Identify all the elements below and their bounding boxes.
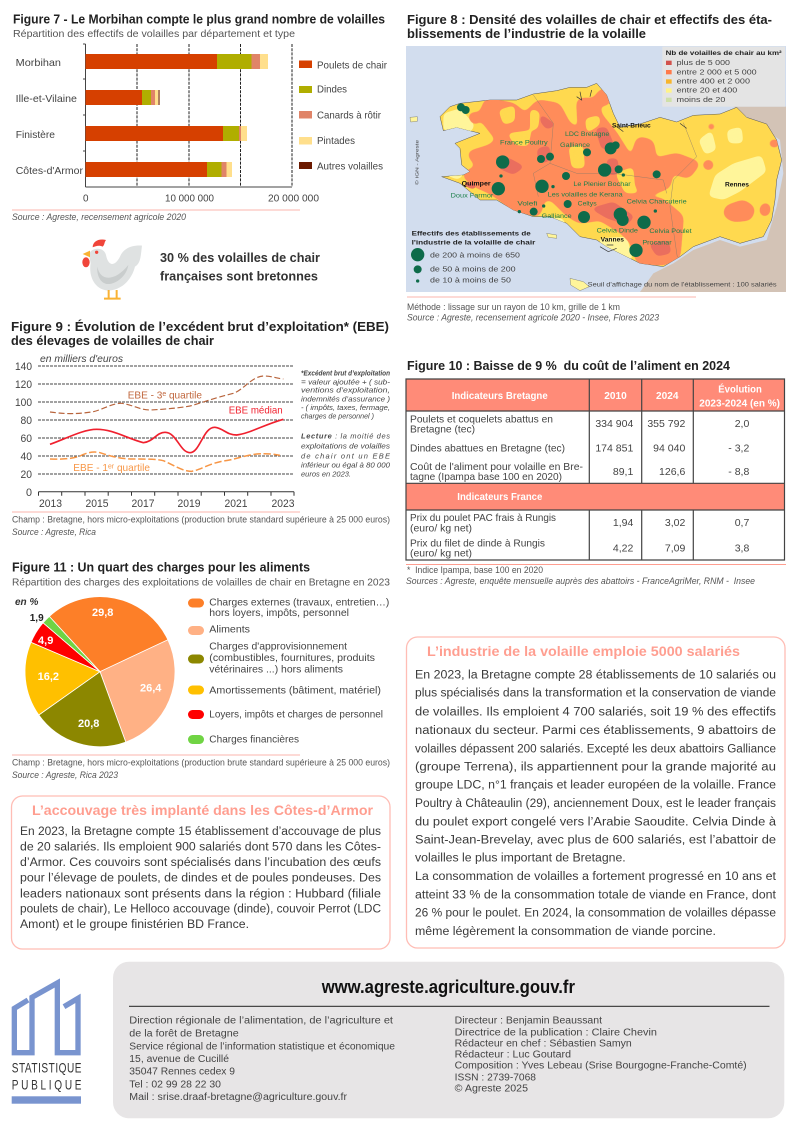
legend: establishment size: de 10 à moins de 50 [430,278,511,285]
table: indicators: 2024 [656,390,679,402]
row: coût aliment: - 8,8 [728,466,749,478]
source: figure 10: Sources : Agreste, enquête mensuelle auprès des abattoirs - FranceAgriMer, RNM - Insee [406,576,755,586]
row: coût aliment: Coût de l'aliment pour volaille en Bre- [410,461,583,473]
establishment labels [451,123,750,247]
legend: charges: Charges financières [209,734,299,746]
legend: establishment size: l'industrie de la volaille de chair [412,239,536,246]
bars: Finistère [86,126,247,141]
credit: IGN: © IGN - Agreste [413,140,420,185]
legend: establishment size: Effectifs des établissements de [412,230,531,237]
source: figure 10 [406,565,755,586]
footer address: Mail : srise.draaf-bretagne@agriculture.gouv.fr [129,1092,348,1103]
legend: establishment size: de 200 à moins de 650 [430,253,520,260]
footer credits [455,1015,747,1095]
text: industrie body: de volailles. Ils emploient 4 700 salariés, soit 19 % des effectifs [415,707,776,719]
establishment labels: LDC Bretagne [565,131,610,138]
panel: figure 10 [406,358,786,586]
row: prix dinde: 7,09 [665,543,685,555]
note: reading guide: inférieur ou égal à 80 000 [301,460,391,469]
establishment labels: Galliance [560,142,591,149]
note: EBE definition [301,369,391,420]
source: figure 8: Source : Agreste, recensement agricole 2020 - Insee, Flores 2023 [407,312,659,322]
row: prix poulet [410,512,749,535]
bar chart: poultry by department: 20 000 000 [268,192,319,204]
series: curves [50,376,283,471]
table: indicators: 2023-2024 (en %) [699,398,780,410]
footer address: Service régional de l’information statistique et économique [129,1041,395,1052]
row: poulets: 355 792 [647,418,685,430]
text: industrie body: plus spécialisés dans la transformation et la conservation de viande [415,688,776,700]
legend: figure 7 [299,60,387,172]
line chart: EBE: EBE - 1ᵉʳ quartile [73,462,150,474]
source: figure 7: Source : Agreste, recensement agricole 2020 [12,212,186,222]
source: figure 9: Source : Agreste, Rica [12,527,96,537]
note: reading guide: de chair ont un EBE [301,451,391,460]
heading: figure 8: blissements de l’industrie de la volaille [407,26,646,41]
legend: density: entre 400 et 2 000 [677,79,750,86]
panel: figure 11 [12,560,390,780]
bars: Côtes-d'Armor [86,162,232,177]
footer address [129,1016,395,1103]
row: dindes: 94 040 [653,443,685,455]
legend: density: plus de 5 000 [677,60,730,67]
land: yellow base [440,83,782,267]
line chart: EBE: 140 [15,361,32,373]
legend: density: Nb de volailles de chair au km² [666,50,782,57]
panel: figure 9 [11,319,391,537]
note: EBE definition: ventions d’exploitation, [301,386,390,395]
note: EBE definition: charges de personnel ) [301,411,374,420]
text: accouvage body: pour l’élevage de poulets, de dindes et de poules pondeuses. Des [20,873,381,885]
row: poulets: Bretagne (tec) [410,424,475,436]
land: islands [410,117,589,291]
line chart: EBE [15,353,294,510]
line chart: EBE: 80 [20,415,32,427]
establishment labels: Quimper [462,181,491,187]
source: figure 11 [12,758,390,780]
panel: figure 7 [12,12,387,222]
logo: Statistique publique [12,983,82,1104]
callout: 30 % des volailles [82,240,320,299]
line chart: EBE: 2023 [272,498,294,510]
row: prix dinde [410,538,749,560]
legend: charges: (combustibles, fournitures, produits [209,652,375,664]
source: figure 11: Source : Agreste, Rica 2023 [12,770,118,780]
heading: industrie: L’industrie de la volaille emploie 5000 salariés [427,643,740,659]
legend: charges: Charges d'approvisionnement [209,640,347,652]
heading: figure 8: Figure 8 : Densité des volailles de chair et effectifs des éta- [407,12,772,27]
heading: figure 7: Figure 7 - Le Morbihan compte le plus grand nombre de volailles [13,12,385,26]
legend: establishment size: de 50 à moins de 200 [430,266,516,273]
source: figure 10: * Indice Ipampa, base 100 en 2020 [407,565,543,575]
text: industrie body: volailles le plus important de Bretagne. [415,852,626,864]
establishment labels: Saint-Brieuc [612,123,651,129]
line chart: EBE: EBE - 3ᵉ quartile [128,390,202,402]
line chart: EBE: 20 [20,469,32,481]
bar chart: poultry by department: Ille-et-Vilaine [16,93,77,105]
legend: charges: Charges externes (travaux, entretien…) [209,597,389,609]
text: accouvage body: leaders nationaux sont présents dans la région : Hubbard (filiale [20,888,381,900]
establishment labels: France Poultry [500,139,549,146]
line chart: EBE: en milliers d'euros [40,353,124,365]
source: figure 9 [12,515,390,537]
text: industrie body: Poultry à Châteaulin (29), anciennement Doux, est le leader français [415,798,776,810]
department boundaries [533,95,697,257]
row: coût aliment: 89,1 [613,466,633,478]
legend: figure 7: Autres volailles [317,160,383,172]
note: reading guide [301,431,391,479]
text: 30 % statistic: 30 % des volailles de chair [160,251,320,265]
legend: density: entre 2 000 et 5 000 [677,69,757,76]
text: industrie body: atteint 33 % de la consommation totale de viande en France, dont [415,890,777,902]
row: prix poulet: 0,7 [735,517,749,529]
footer address: Tel : 02 99 28 22 30 [129,1079,221,1090]
heading: accouvage: L’accouvage très implanté dans les Côtes-d’Armor [32,802,374,818]
establishment labels: Celvia Dinde [597,228,639,235]
legend: figure 7: Pintades [317,135,355,147]
text: industrie body: groupe LDC, n°1 français et leader européen de la volaille. France [415,780,776,792]
text: accouvage body: Amont) et le groupe finistérien BD France. [20,919,249,931]
line chart: EBE: 2013 [39,498,62,510]
establishment labels: Vannes [601,238,625,244]
pie chart: charges [15,597,175,747]
table: indicators: Évolution [718,383,762,396]
footer address: 15, avenue de Cucillé [129,1054,229,1065]
legend: charges: Amortissements (bâtiment, matériel) [209,684,381,696]
footer credits: Rédacteur : Luc Goutard [455,1050,571,1061]
legend: charges [188,597,389,746]
text: accouvage body: poulets de chair), Le Helloco accouvage (dinde), couvoir Perrot (LDC [20,904,381,916]
bar chart: poultry by department: Finistère [16,129,55,141]
legend: figure 7: Canards à rôtir [317,110,381,122]
row: dindes: 174 851 [595,443,633,455]
text: industrie body [415,669,777,938]
source: figure 11: Champ : Bretagne, hors micro-exploitations (production brute standard supérieure à 25 000 euros) [12,758,390,768]
row: poulets [410,414,749,436]
text: accouvage body [20,826,381,931]
line chart: EBE: 2017 [132,498,154,510]
line chart: EBE: EBE médian [229,405,283,417]
text: industrie body: (groupe Terrena), ils appartiennent pour la grande majorité au [415,761,776,773]
footer url: www.agreste.agriculture.gouv.fr [321,977,575,997]
row: poulets: 2,0 [735,418,749,430]
heading: figure 9: Figure 9 : Évolution de l’excédent brut d’exploitation* (EBE) [11,319,389,334]
panel: industrie text box [406,637,785,948]
legend: charges: Aliments [209,624,250,636]
legend: figure 7: Poulets de chair [317,60,387,72]
text: industrie body: 26 % pour le poulet. En 2024, la consommation de volailles dépasse [415,908,776,920]
text: industrie body: La consommation de volailles a fortement progressé en 10 ans et [415,871,777,883]
row: prix poulet: 1,94 [613,517,633,529]
establishment circles [457,103,661,257]
footer credits: ISSN : 2739-7068 [455,1072,536,1083]
heading: figure 11: Figure 11 : Un quart des charges pour les aliments [12,560,310,575]
legend: figure 7: Dindes [317,84,347,96]
pie chart: charges: 29,8 [92,607,113,619]
line chart: EBE: 60 [20,433,32,445]
heading: figure 9 [11,319,389,348]
line chart: EBE: 40 [20,451,32,463]
note: EBE definition: - ( impôts, taxes, fermage, [301,403,390,412]
footer credits: Composition : Yves Lebeau (Srise Bourgogne-Franche-Comté) [455,1061,747,1072]
panel: figure 8 [406,12,786,322]
pie chart: charges: 1,9 [30,613,44,624]
table: indicators: 2010 [604,390,627,402]
heading: figure 9: des élevages de volailles de chair [11,333,214,348]
footer address: 35047 Rennes cedex 9 [129,1066,235,1077]
footer credits: Directeur : Benjamin Beaussant [455,1015,602,1026]
subtitle: figure 11: Répartition des charges des exploitations de volailles de chair en Bretagne en 2023 [12,577,390,589]
row: prix dinde: Prix du filet de dinde à Rungis [410,538,545,550]
bar chart: poultry by department [16,44,319,204]
panel: footer [113,962,784,1118]
establishment labels: Procanar [642,240,672,247]
text: industrie body: volailles dépassent 200 salariés. Excepté les deux abattoirs Galliance [415,743,776,755]
source: figure 8: Méthode : lissage sur un rayon de 10 km, grille de 1 km [407,302,620,313]
table: indicators [406,379,784,560]
row: poulets: Poulets et coquelets abattus en [410,414,553,426]
text: industrie body: Saint-Jean-Brevelay, avec plus de 600 salariés, est l’abattoir de [415,834,776,846]
legend: establishment size [411,230,536,285]
establishment labels: Celtys [578,200,597,207]
row: prix dinde: 3,8 [735,543,749,555]
bars: Morbihan [86,54,268,69]
footer credits: Rédacteur en chef : Sébastien Samyn [455,1039,632,1050]
heading: figure 10: Figure 10 : Baisse de 9 % du coût de l’aliment en 2024 [407,358,731,373]
note: reading guide: Lecture : la moitié des [301,431,390,440]
bars: Ille-et-Vilaine [86,90,160,105]
legend: charges: vétérinaires ...) hors aliments [209,663,343,675]
establishment labels: Celvia Poulet [649,228,692,235]
line chart: EBE: 120 [15,379,32,391]
legend: density: moins de 20 [677,97,725,104]
text: industrie body: du poulet export congelé vers l’Arabie Saoudite. Celvia Dinde à [415,816,777,828]
bar chart: poultry by department: 10 000 000 [165,192,214,204]
row: prix poulet: Prix du poulet PAC frais à Rungis [410,512,556,524]
pie chart: charges: en % [15,597,38,608]
establishment labels: Les volailles de Kerana [548,192,623,199]
logo: Statistique publique: PUBLIQUE [12,1077,82,1093]
row: dindes: - 3,2 [728,443,749,455]
row: prix poulet: (euro/ kg net) [410,523,472,535]
panel: accouvage text box [12,796,390,949]
subtitle: figure 7: Répartition des effectifs de volailles par département et type [13,28,295,40]
legend: density: entre 20 et 400 [677,88,737,95]
note: display threshold: Seuil d'affichage du nom de l'établissement : 100 salariés [588,283,777,289]
bar chart: poultry by department: Côtes-d'Armor [16,165,83,177]
row: prix dinde: (euro/ kg net) [410,548,472,560]
land: density layers [442,88,779,263]
text: industrie body: En 2023, la Bretagne compte 28 établissements de 10 salariés ou [415,669,776,681]
text: industrie body: même légèrement la consommation de viande porcine. [415,926,716,938]
legend: density [662,47,785,107]
establishment labels: Volefi [517,200,537,207]
line chart: EBE: 2015 [86,498,108,510]
footer address: de la forêt de Bretagne [129,1029,239,1040]
row: coût aliment: tagne (Ipampa base 100 en 2020) [410,471,562,483]
heading: figure 8 [407,12,772,41]
table: indicators: Indicateurs France [457,491,542,503]
icon: rooster [82,240,142,299]
row: poulets: 334 904 [595,418,633,430]
establishment labels: Galliance [542,213,572,220]
table: indicators: Indicateurs Bretagne [452,390,548,402]
establishment labels: Doux Farmor [451,192,493,199]
row: dindes: Dindes abattues en Bretagne (tec) [410,443,565,455]
line chart: EBE: 2019 [178,498,200,510]
bar chart: poultry by department: Morbihan [16,57,61,69]
logo: Statistique publique: STATISTIQUE [12,1060,82,1076]
establishment labels: Le Plenier Bochar [573,181,631,188]
row: coût aliment: 126,6 [659,466,685,478]
line chart: EBE: 2021 [224,498,248,510]
row: dindes [410,443,749,455]
source: figure 8 [407,302,659,322]
note: EBE definition: = valeur ajoutée + ( sub- [301,377,391,386]
note: reading guide: euros en 2023. [301,470,351,479]
row: prix poulet: 3,02 [665,517,685,529]
legend: charges: Loyers, impôts et charges de personnel [209,708,383,720]
text: accouvage body: En 2023, la Bretagne compte 15 établissement d’accouvage de plus [20,826,381,838]
bar chart: poultry by department: 0 [83,192,89,204]
row: coût aliment [410,461,749,483]
row: prix dinde: 4,22 [613,543,633,555]
text: industrie body: nationaux du secteur. Parmi ces établissements, 9 abattoirs de [415,725,776,737]
note: reading guide: exploitations de volailles [301,441,390,450]
pie chart: charges: 4,9 [38,635,53,647]
footer credits: © Agreste 2025 [455,1084,528,1095]
pie chart: charges: 26,4 [140,682,162,694]
source: figure 9: Champ : Bretagne, hors micro-exploitations (production brute standard supérieure à 25 000 euros) [12,515,390,525]
footer address: Direction régionale de l’alimentation, de l’agriculture et [129,1016,393,1027]
line chart: EBE: 100 [15,397,32,409]
note: EBE definition: *Excédent brut d’exploitation [301,369,390,378]
establishment labels: Celvia Charcuterie [627,198,687,205]
text: accouvage body: d’Armor. Ces couvoirs sont spécialisés dans l’incubation des œufs [20,857,381,869]
legend: charges: hors loyers, impôts, personnel [209,607,349,619]
note: EBE definition: indemnités d’assurance ) [301,394,391,403]
text: accouvage body: de 20 salariés. Ils emploient 900 salariés dont 570 dans les Côtes- [20,841,381,853]
pie chart: charges: 20,8 [78,718,99,730]
map: Brittany density [406,46,786,292]
text: 30 % statistic: françaises sont bretonnes [160,270,318,284]
footer credits: Directrice de la publication : Claire Chevin [455,1027,657,1038]
text: 30 % statistic [160,251,320,284]
coast details [577,90,687,252]
pie chart: charges: 16,2 [38,671,59,683]
line chart: EBE: 0 [26,487,32,499]
establishment labels: Rennes [725,183,750,189]
